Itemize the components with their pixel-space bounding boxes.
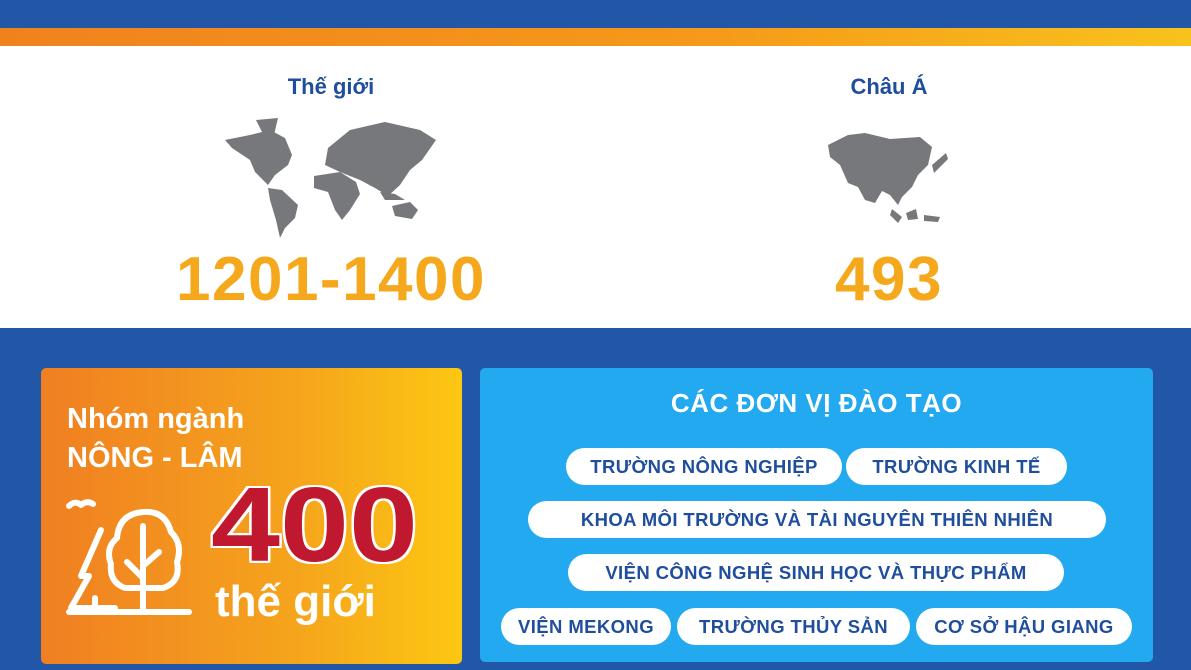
text: world: thế giới [215,577,376,626]
number: world rank: 1201-1400 [176,245,486,314]
pill: Cơ sở Hậu Giang [916,608,1132,645]
pill: Viện Mekong [501,608,671,645]
pill: Trường Thủy sản [677,608,910,645]
panel: agriculture-forestry [41,368,462,664]
pill: Cơ sở Hậu Giang: CƠ SỞ HẬU GIANG [934,616,1114,636]
pill: Khoa Môi trường [528,501,1106,538]
white ranking panel [0,46,1191,328]
pill: Viện CNSH: VIỆN CÔNG NGHỆ SINH HỌC VÀ THỰC PHẨM [605,562,1027,582]
pill: Trường Kinh tế [846,448,1067,485]
top blue band [0,0,1191,28]
pill: Trường Nông nghiệp: TRƯỜNG NÔNG NGHIỆP [590,456,818,476]
orange stripe [0,28,1191,46]
heading text [67,403,244,474]
heading: world: Thế giới [288,74,374,99]
number: Asia rank: 493 [835,245,943,314]
icon: world map [225,118,436,238]
heading text: NÔNG - LÂM [67,442,243,474]
heading text: Nhóm ngành [67,403,244,435]
heading: Asia: Châu Á [850,74,928,99]
pill: Trường Thủy sản: TRƯỜNG THỦY SẢN [699,616,888,636]
pill: Viện CNSH [568,554,1064,591]
pill: Trường Kinh tế: TRƯỜNG KINH TẾ [872,456,1041,476]
icon: trees [66,499,192,615]
panel: training units [480,368,1153,662]
number: 400: 400 [211,466,418,584]
icon: Asia map [828,133,948,223]
pill: Viện Mekong: VIỆN MEKONG [518,616,654,636]
pill: Khoa Môi trường: KHOA MÔI TRƯỜNG VÀ TÀI NGUYÊN THIÊN NHIÊN [581,508,1053,530]
pill: Trường Nông nghiệp [566,448,842,485]
heading: CÁC ĐƠN VỊ ĐÀO TẠO [671,388,962,418]
